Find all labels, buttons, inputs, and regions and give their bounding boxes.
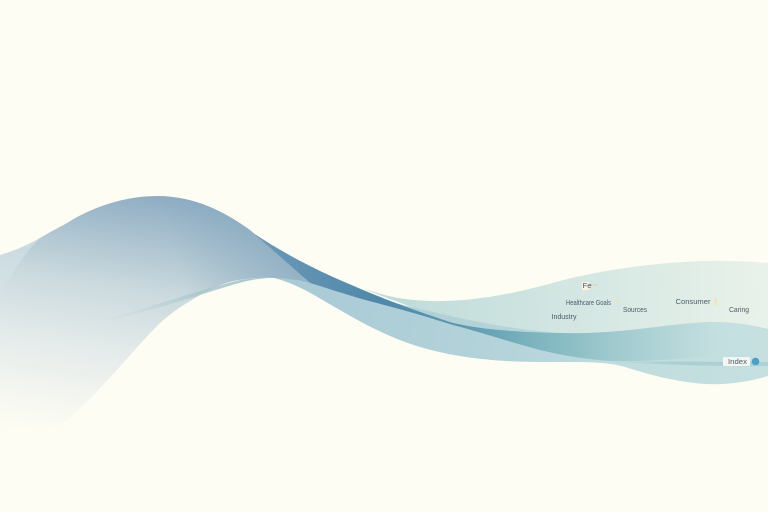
label: Healthcare: Healthcare Goals [566,300,611,307]
label: Fe: rn [591,282,597,287]
label: Fe: Fe [582,283,592,290]
thin line in lower right band [612,362,768,366]
label: Fe [582,282,597,290]
ribbon: upper right light band [362,261,768,345]
label: Caring: Caring [729,307,749,314]
ribbon: left far edge fold [0,238,40,300]
labels group [552,282,759,366]
icon: yellow mark [616,299,618,304]
ribbon: dark blue to teal band [246,228,768,361]
label: Sources: Sources [623,307,647,314]
tag: Index: Index [728,359,748,366]
ribbon shading near the right of the left wave [0,196,310,448]
label: Consumer: Consumer [676,299,711,306]
thin streak across left wave [90,278,268,323]
ribbon: large left blue wave [0,196,310,448]
tag: Index [723,357,750,366]
ribbon: lower band [270,277,768,384]
icon: blue dot [752,358,759,365]
label: Industry: Industry [552,314,577,321]
icon: yellow mark [714,298,716,305]
